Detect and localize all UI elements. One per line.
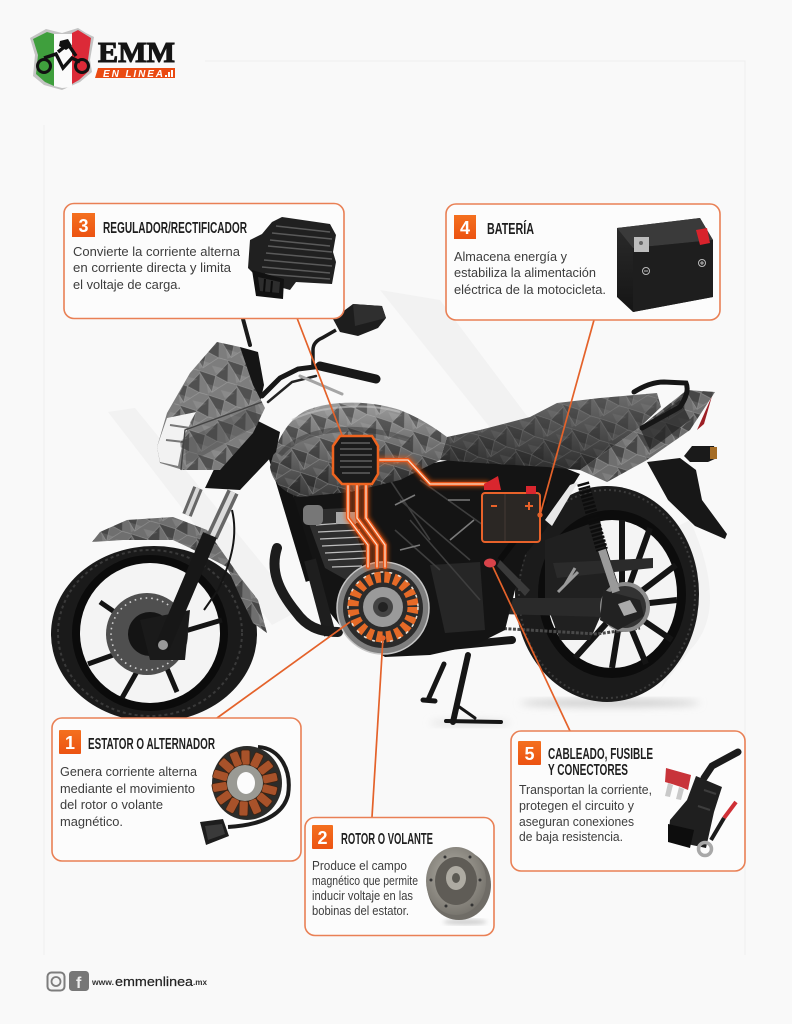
icon: battery (617, 218, 713, 312)
website: emmenlinea (115, 975, 193, 989)
ground shadow (430, 700, 700, 726)
badge 5: 5 (524, 744, 535, 764)
panel 3: regulador/rectificador (64, 204, 344, 318)
heading 5: CABLEADO, FUSIBLE (548, 746, 653, 763)
badge 3: 3 (78, 216, 89, 236)
panel 1: estator o alternador (52, 718, 301, 861)
badge 5 (518, 741, 541, 765)
badge 4: 4 (460, 218, 470, 238)
badge 2 (312, 825, 333, 849)
clutch cover (337, 562, 429, 654)
text 3: en corriente directa y limita (73, 260, 232, 275)
heading 5 (548, 746, 653, 779)
icon: rotor (426, 847, 491, 925)
rear wheel (515, 486, 699, 702)
frame details (270, 440, 578, 635)
fuse on motorcycle (484, 558, 496, 568)
text 1: mediante el movimiento (60, 781, 195, 796)
seat (440, 393, 661, 470)
logo (30, 28, 175, 90)
icon: connector and cables (668, 752, 738, 856)
website (91, 975, 208, 989)
text 4: Almacena energía y (454, 249, 567, 264)
icon: stator (200, 746, 289, 845)
panel 5: cableado, fusible y conectores (511, 731, 745, 871)
heading 4: BATERÍA (487, 219, 534, 238)
logo subtitle bar (95, 68, 175, 80)
front forks (158, 488, 234, 650)
text 4: estabiliza la alimentación (454, 265, 596, 280)
icon: regulator (248, 217, 336, 299)
stator on motorcycle (348, 572, 418, 642)
text 4 (454, 249, 606, 297)
text 2: bobinas del estator. (312, 904, 409, 918)
heading 2: ROTOR O VOLANTE (341, 831, 433, 848)
icon: fuse (665, 768, 691, 800)
text 5 (519, 782, 652, 844)
icon: facebook (69, 971, 89, 992)
motorcycle illustration (51, 304, 727, 726)
text 5: protegen el circuito y (519, 798, 634, 813)
grab rail (634, 382, 687, 428)
exhaust pipes (274, 548, 338, 632)
badge 1: 1 (65, 733, 75, 753)
website: .mx (193, 978, 208, 987)
rear shock absorber (583, 483, 616, 592)
panel 4: bateria (446, 204, 720, 320)
text 3 (73, 244, 241, 292)
front wheel (51, 546, 257, 722)
headlight (157, 412, 196, 466)
front fender (92, 517, 267, 633)
heading 5: Y CONECTORES (548, 762, 628, 779)
heading 3: REGULADOR/RECTIFICADOR (103, 220, 247, 237)
text 1: magnético. (60, 814, 123, 829)
callout leader lines (217, 318, 594, 817)
badge 1 (59, 730, 81, 754)
text 2 (312, 859, 418, 918)
text 3: Convierte la corriente alterna (73, 244, 241, 259)
main stand (423, 640, 512, 722)
logo subtitle bar: EN LINEA (103, 69, 163, 80)
swingarm and chain (477, 558, 653, 634)
engine cylinder (303, 505, 366, 582)
text 1 (60, 764, 198, 829)
tail section (580, 390, 715, 482)
frame and engine block (292, 460, 580, 657)
logo wordmark: EMM (98, 37, 175, 69)
badge 3 (72, 213, 95, 237)
steering head (205, 347, 280, 490)
website: www. (91, 978, 114, 987)
icon: instagram (48, 972, 64, 990)
text 4: eléctrica de la motocicleta. (454, 282, 606, 297)
badge 4 (454, 215, 476, 239)
rear turn signal (684, 446, 717, 462)
glowing wires (348, 460, 487, 567)
text 1: del rotor o volante (60, 797, 163, 812)
text 1: Genera corriente alterna (60, 764, 198, 779)
icon: facebook: f (76, 975, 82, 992)
fuel tank (270, 403, 447, 497)
mirror (313, 304, 386, 366)
text 2: inducir voltaje en las (312, 889, 413, 903)
regulator on motorcycle (333, 436, 378, 484)
brake disc (106, 593, 190, 675)
text 2: Produce el campo (312, 859, 407, 873)
panel 2: rotor o volante (305, 818, 494, 936)
fairing and headlight (157, 342, 265, 470)
badge 2: 2 (317, 828, 328, 848)
text 5: de baja resistencia. (519, 829, 623, 844)
handlebar (243, 319, 376, 402)
text 2: magnético que permite (312, 874, 418, 888)
text 3: el voltaje de carga. (73, 277, 181, 292)
heading 1: ESTATOR O ALTERNADOR (88, 736, 215, 753)
text 5: aseguran conexiones (519, 814, 634, 829)
icon: shield (30, 28, 94, 90)
rear mudguard (647, 458, 727, 539)
footer (48, 971, 208, 992)
battery on motorcycle (482, 476, 540, 542)
text 5: Transportan la corriente, (519, 782, 652, 797)
